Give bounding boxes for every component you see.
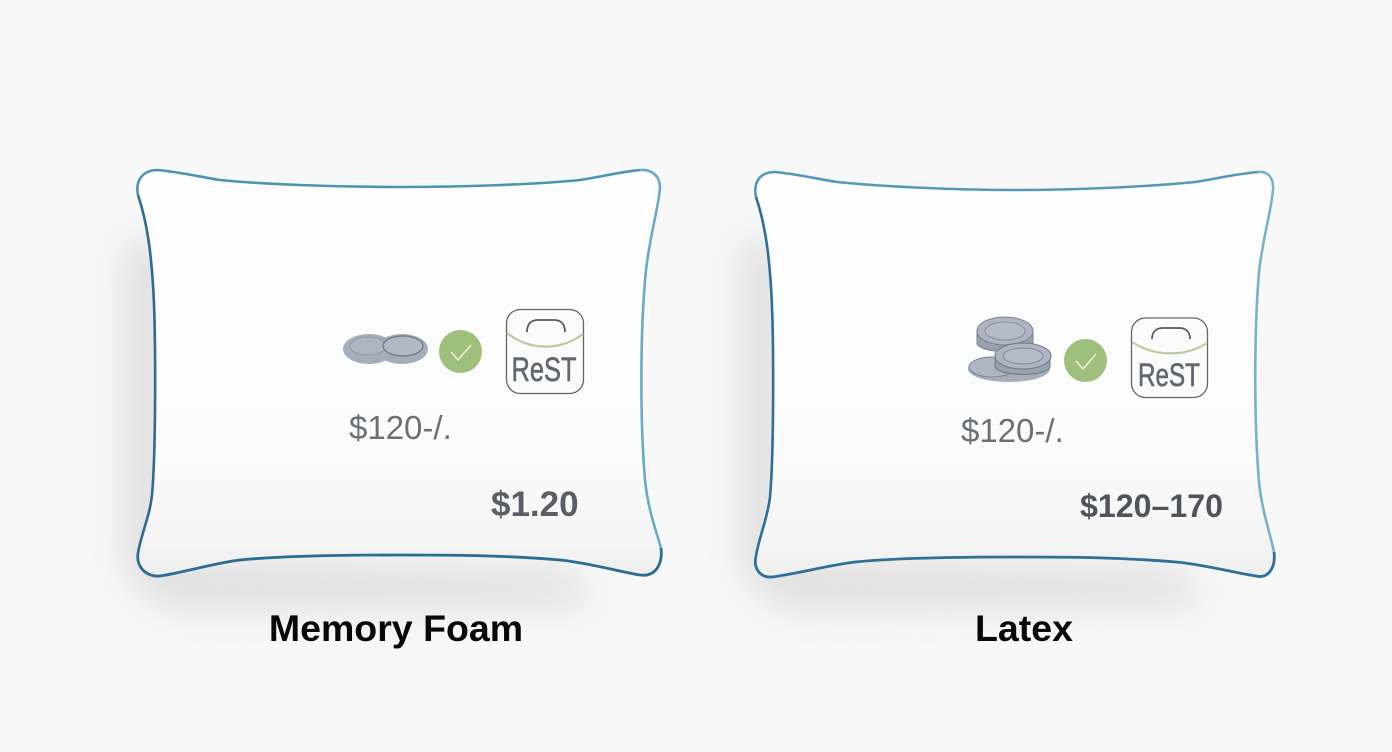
icon: rest logo — [1132, 318, 1208, 398]
piping: top — [755, 172, 1258, 197]
heading: latex: Latex — [975, 607, 1073, 649]
pillow shadow — [742, 240, 1210, 610]
icon: green check badge — [1064, 339, 1107, 382]
piping: bottom — [138, 548, 661, 576]
piping: right — [1255, 172, 1274, 552]
piping: left — [756, 197, 773, 556]
icon: rest logo: ReST — [512, 351, 576, 389]
panel: memory foam pillow — [125, 170, 661, 610]
pillow body — [755, 172, 1274, 577]
piping: left — [138, 195, 155, 553]
icon: rest logo — [506, 310, 584, 394]
icon: green check badge — [439, 330, 482, 373]
pillow body — [137, 170, 661, 576]
icon: stacked coins — [968, 317, 1051, 382]
icon: rest logo: ReST — [1138, 357, 1200, 393]
panel: latex pillow — [742, 172, 1274, 610]
price text: $120-/. — [961, 412, 1064, 449]
pillow shadow — [125, 240, 600, 610]
piping: top — [137, 170, 640, 195]
piping: right — [640, 170, 661, 548]
piping: bottom — [755, 552, 1274, 577]
heading: memory foam: Memory Foam — [269, 607, 523, 649]
price text: $120-/. — [349, 409, 452, 446]
price value: $1.20 — [491, 485, 579, 524]
icon: two flat coins — [343, 334, 428, 364]
price value: $120–170 — [1080, 488, 1223, 524]
